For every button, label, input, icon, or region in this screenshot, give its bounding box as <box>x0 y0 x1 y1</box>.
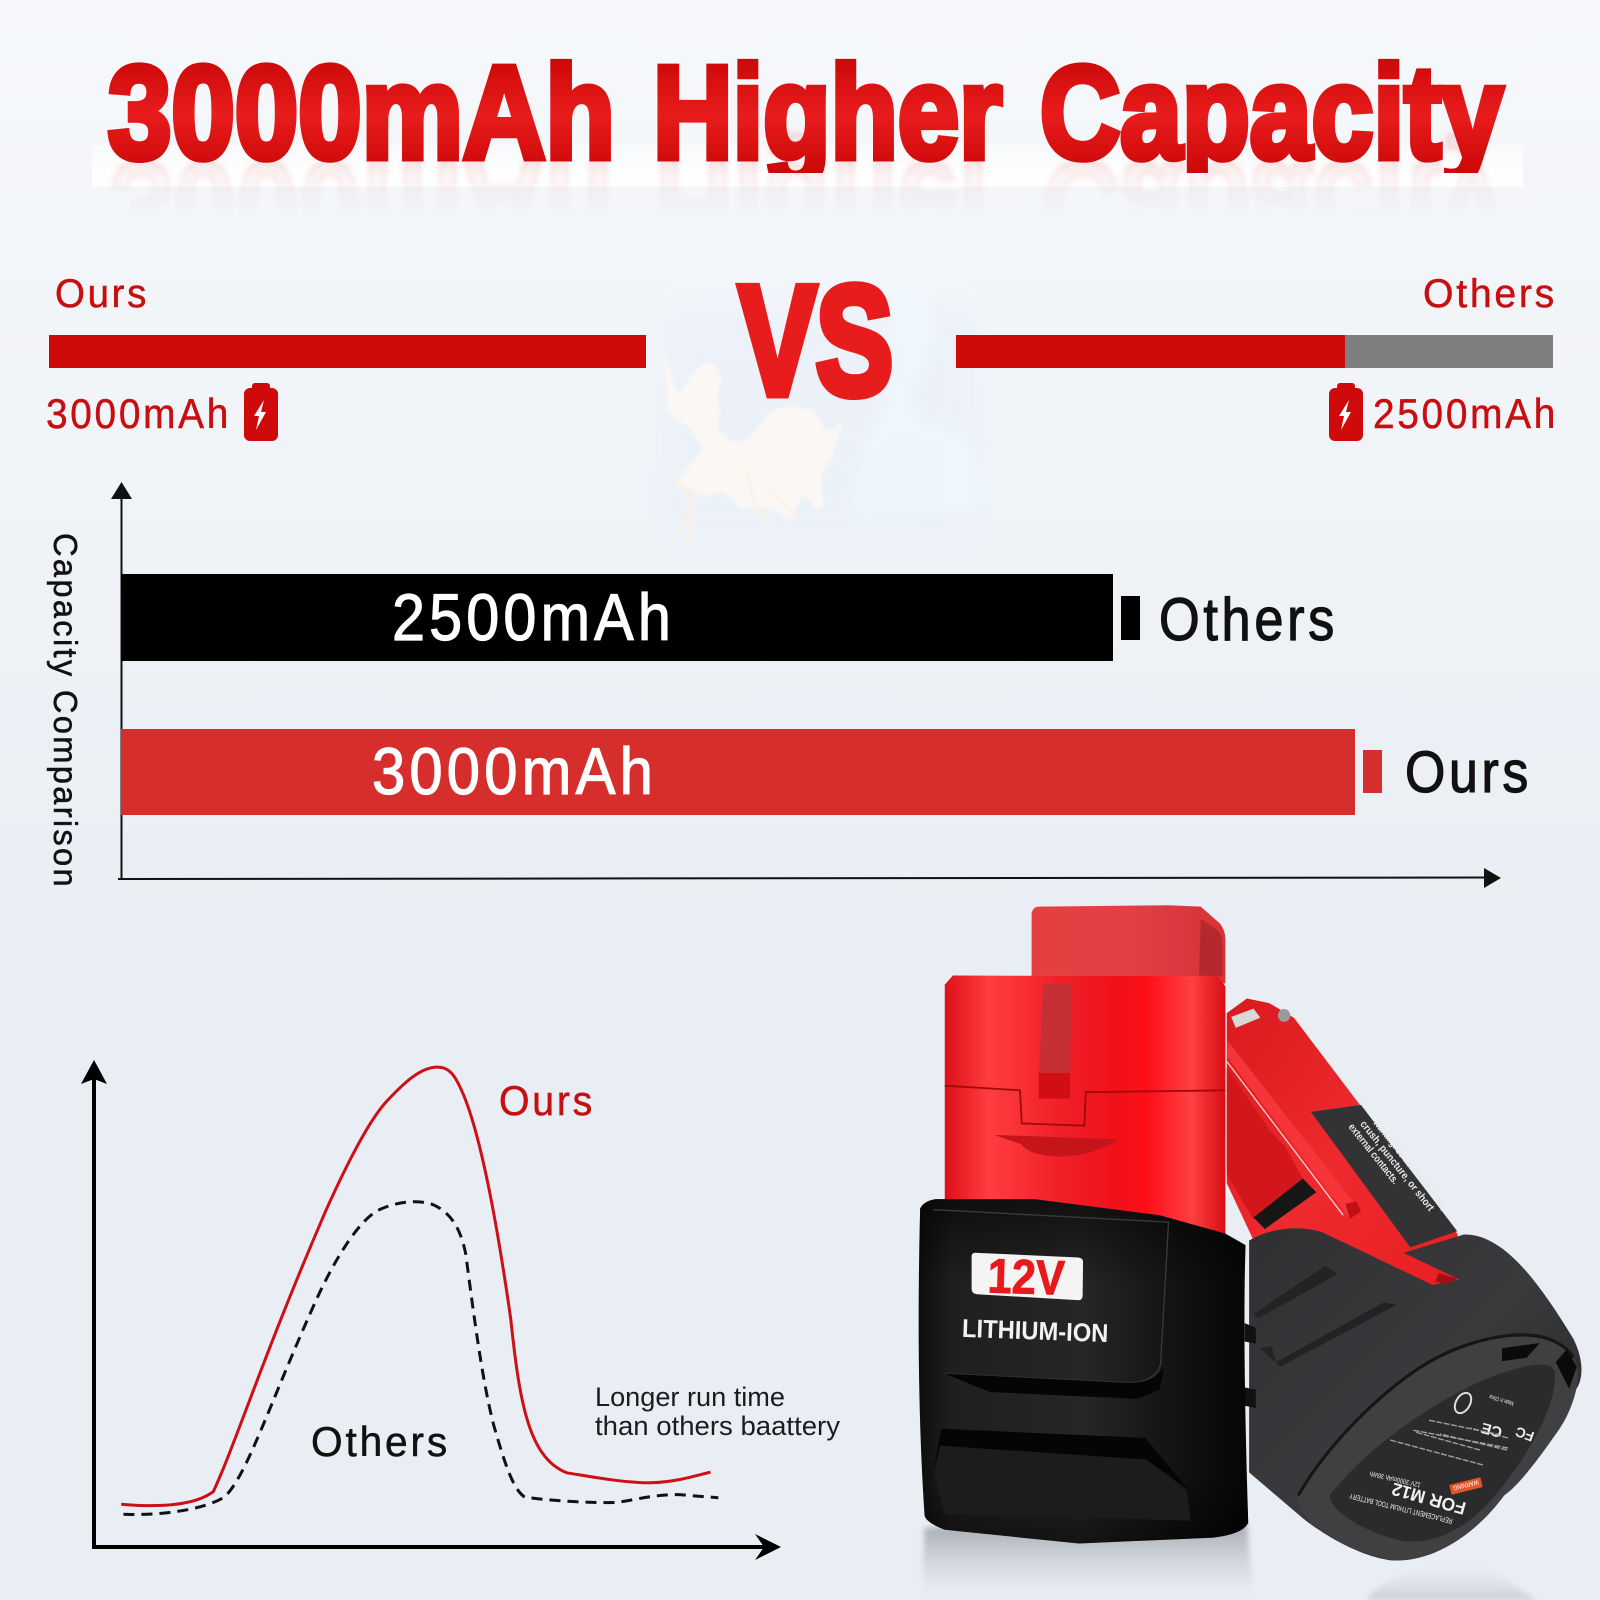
body seam <box>945 1086 1225 1126</box>
title reflection band: Higher <box>654 134 1001 281</box>
certification marks: CE <box>1480 1419 1504 1441</box>
rear battery caution text: Warning: do not disassemble, <box>1370 1117 1449 1212</box>
rear battery latch <box>1254 1178 1316 1229</box>
ours curve label: Ours <box>499 1077 595 1124</box>
chart axes <box>81 1060 781 1560</box>
front battery top block <box>1032 905 1225 983</box>
spec text: 12V 3000mAh 36Wh <box>1369 1469 1421 1488</box>
warning tag: WARNING <box>1452 1478 1479 1491</box>
ours curve <box>121 1067 710 1506</box>
warning tag <box>1449 1477 1483 1495</box>
y axis arrow <box>111 482 132 879</box>
flame behind VS <box>664 278 981 545</box>
bar chart: capacity comparison <box>47 482 1532 889</box>
others bar filled <box>956 335 1345 368</box>
rear battery caution text: external contacts. <box>1346 1121 1401 1187</box>
12V badge: 12V <box>987 1249 1066 1306</box>
others capacity value: 2500mAh <box>1373 390 1558 437</box>
title: 3000mAh <box>108 39 615 186</box>
ours capacity value: 3000mAh <box>46 390 231 437</box>
y axis label: Capacity Comparison <box>47 533 84 889</box>
product description: REPLACEMENT LITHIUM TOOL BATTERY <box>1348 1491 1453 1526</box>
others bar remainder <box>1345 335 1553 368</box>
body notch <box>1039 984 1072 1099</box>
rear battery slot <box>1435 1273 1458 1284</box>
ours label: Ours <box>55 272 149 316</box>
end plate markings <box>1348 1390 1536 1526</box>
front battery red body <box>945 976 1225 1236</box>
rear battery end plate face <box>1330 1365 1555 1542</box>
rear battery end plate rim <box>1298 1335 1578 1561</box>
base lower panel <box>934 1429 1191 1521</box>
ours legend <box>1363 740 1532 805</box>
rear battery caution text: crush, puncture, or short <box>1357 1118 1437 1214</box>
model text: FOR M12 <box>1389 1479 1468 1518</box>
others bar: 2500mAh <box>392 580 675 654</box>
body thumb recess <box>994 1135 1119 1157</box>
title reflection band: Capacity <box>1041 134 1503 281</box>
rear battery warning label <box>1311 1105 1457 1247</box>
ours bar: 3000mAh <box>372 734 657 808</box>
run time note: than others baattery <box>595 1411 841 1441</box>
rear battery <box>1227 998 1581 1561</box>
ours legend: Ours <box>1405 740 1532 805</box>
panel: ours capacity <box>46 272 646 441</box>
rear battery grooves <box>1254 1266 1338 1319</box>
front battery <box>919 905 1248 1544</box>
ours bar <box>49 335 646 368</box>
panel: others capacity <box>956 272 1558 441</box>
VS label: VS <box>739 254 893 427</box>
instruction lines <box>1390 1420 1508 1465</box>
ours bar <box>121 729 1355 815</box>
title reflection band: 3000mAh <box>110 134 613 281</box>
front battery black base <box>919 1199 1248 1544</box>
line chart: run time curves <box>81 1060 841 1560</box>
battery reflections <box>921 1523 1536 1600</box>
lithium-ion label: LITHIUM-ION <box>962 1315 1109 1348</box>
others dashed curve <box>123 1202 718 1514</box>
rear battery red housing <box>1227 998 1465 1293</box>
certification marks: FC <box>1513 1424 1536 1445</box>
title <box>107 58 1507 173</box>
title reflection band <box>92 134 1523 281</box>
rear battery black base <box>1249 1228 1581 1561</box>
rear battery slots <box>1502 1343 1577 1389</box>
run time note: Longer run time <box>595 1382 785 1412</box>
certification marks <box>1451 1390 1536 1445</box>
run time note <box>595 1382 841 1441</box>
base shadow band <box>945 1367 1164 1399</box>
x axis arrow <box>118 868 1501 888</box>
base upper panel <box>934 1210 1169 1383</box>
battery product image <box>919 905 1581 1600</box>
others bar <box>121 574 1113 661</box>
icon: battery ours <box>244 383 278 441</box>
title: Higher <box>653 39 1002 186</box>
others curve label: Others <box>311 1418 450 1465</box>
title: Capacity <box>1040 39 1503 186</box>
certification marks: Made in China <box>1489 1393 1515 1406</box>
others legend: Others <box>1159 586 1338 653</box>
others label: Others <box>1423 272 1557 316</box>
icon: battery others <box>1329 383 1363 441</box>
